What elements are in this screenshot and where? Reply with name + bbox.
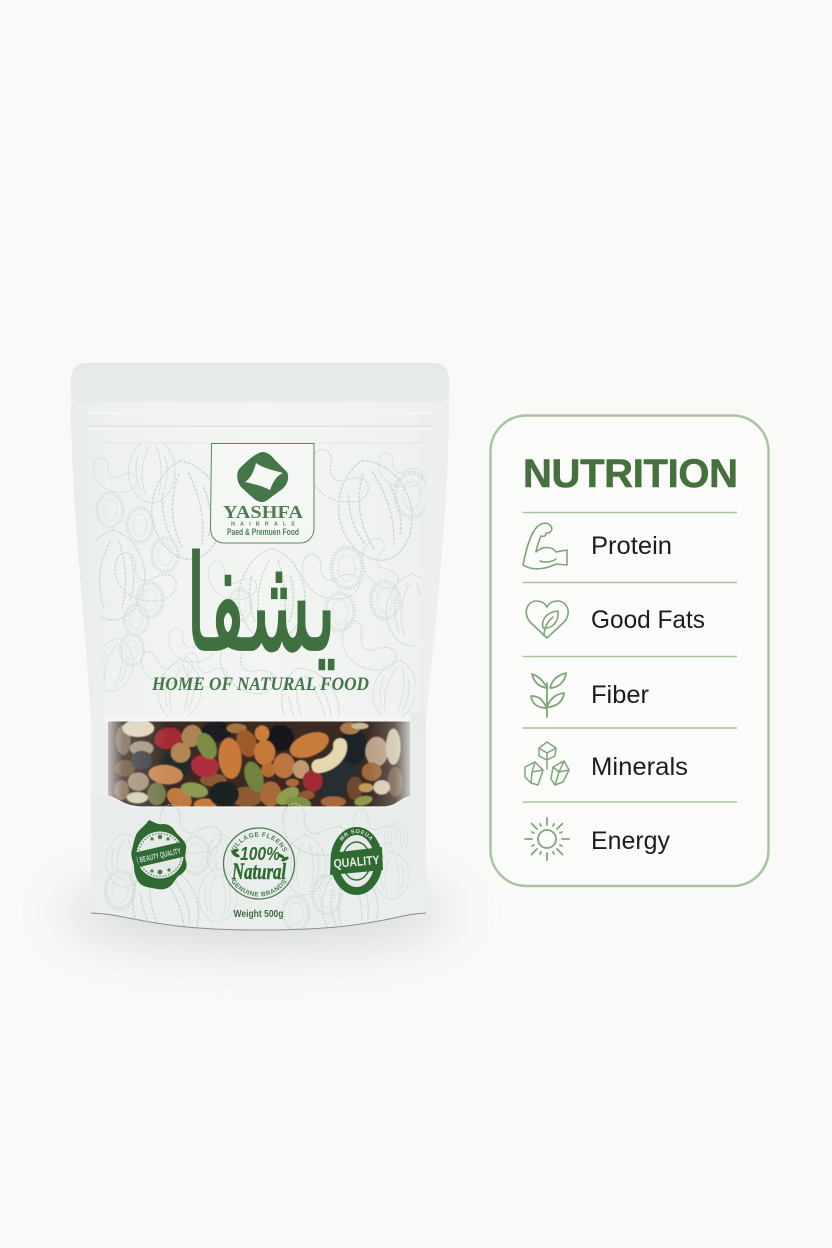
product pouch xyxy=(71,363,449,930)
icon: sun xyxy=(525,818,569,860)
weight label: Weight 500g xyxy=(234,908,284,920)
divider lines xyxy=(522,512,737,802)
label: minerals: Minerals xyxy=(591,753,688,781)
red berries xyxy=(190,754,220,778)
raisin xyxy=(209,781,239,807)
window sheen xyxy=(108,719,410,809)
label: energy: Energy xyxy=(591,827,670,855)
badge: Premium Quality seal xyxy=(131,820,187,889)
pouch body xyxy=(71,402,449,930)
icon: heart with leaf xyxy=(526,601,568,638)
slogan: HOME OF NATURAL FOOD xyxy=(151,675,369,695)
badge Natural: Natural xyxy=(231,859,286,884)
label: protein: Protein xyxy=(591,532,672,560)
icon: flexed arm xyxy=(523,523,567,569)
quality ribbon xyxy=(330,847,383,875)
card title: NUTRITION xyxy=(523,452,738,496)
brown nut pieces xyxy=(171,743,191,763)
badge leaves xyxy=(231,848,289,862)
brand name: YASHFA xyxy=(223,502,303,522)
brand tagline: Paed & Premuen Food xyxy=(227,527,299,538)
quality label: QUALITY xyxy=(333,853,381,871)
badge 100%: 100% xyxy=(240,844,280,864)
dark base nuts xyxy=(114,722,402,807)
lower pouch panel xyxy=(91,712,426,930)
badge: 100% Natural xyxy=(222,827,296,900)
label: good fats: Good Fats xyxy=(591,606,705,634)
stippled nut pattern, lower xyxy=(104,802,410,930)
cashew pale xyxy=(122,720,154,737)
icon: sprout xyxy=(531,673,566,717)
logo emblem xyxy=(237,452,288,502)
arabic wordmark: يشفا xyxy=(185,529,337,682)
label: fiber: Fiber xyxy=(591,681,649,709)
icon: crystals xyxy=(525,742,569,785)
seal ribbon label: BEAUTY QUALITY xyxy=(139,846,182,865)
seal ribbon xyxy=(136,842,185,867)
pumpkin seeds xyxy=(196,732,218,760)
stippled nut pattern, upper xyxy=(93,443,426,716)
window top lip xyxy=(104,716,414,722)
almonds xyxy=(217,737,243,780)
pale nuts xyxy=(127,792,148,803)
badge: Quality xyxy=(330,827,383,895)
row: good fats xyxy=(526,601,705,638)
window with nuts xyxy=(108,719,410,813)
row: minerals xyxy=(525,742,688,785)
card frame xyxy=(490,416,768,886)
pouch top seal xyxy=(71,363,449,430)
logo box xyxy=(210,444,314,543)
quality ring text: MR SOEUA xyxy=(339,829,372,841)
zip lines xyxy=(87,413,432,443)
infographic canvas xyxy=(66,363,770,966)
pouch ground shadow xyxy=(63,876,453,948)
nutrition card xyxy=(490,416,768,886)
row: protein xyxy=(523,523,672,569)
cashew xyxy=(318,745,340,766)
badge ring text bottom: GENUINE BRANDS xyxy=(232,880,286,896)
brand sublabel: NAIBRALE xyxy=(231,522,295,528)
seal stars xyxy=(150,835,171,874)
row: energy xyxy=(525,818,670,860)
row: fiber xyxy=(531,673,649,717)
badge ring text top: VILLAGE FLEENS xyxy=(230,832,287,852)
goji berry xyxy=(154,727,182,750)
